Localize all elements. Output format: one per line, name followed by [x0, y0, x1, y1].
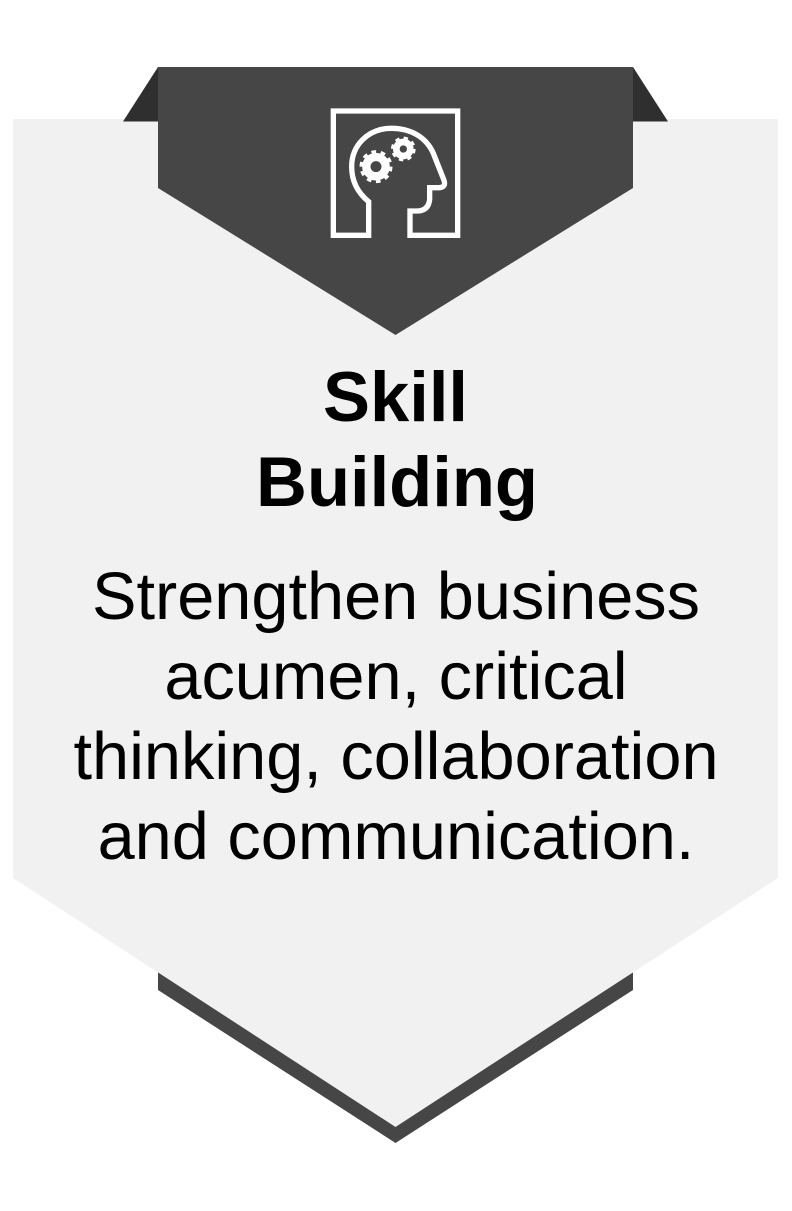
- left ribbon fold: [123, 67, 158, 122]
- large gear: [361, 152, 391, 181]
- body line 1: Strengthen business: [92, 560, 700, 634]
- body line 4: and communication.: [98, 800, 694, 874]
- right ribbon fold: [633, 67, 668, 122]
- bottom dark chevron shadow: [158, 960, 633, 1143]
- heading line 2: Building: [256, 442, 538, 521]
- body line 2: acumen, critical: [164, 640, 628, 714]
- icon: head with gears: [333, 111, 458, 235]
- dark top ribbon: [158, 67, 633, 335]
- small gear: [393, 138, 414, 160]
- icon frame and head outline: [333, 111, 458, 235]
- body text: [73, 560, 719, 874]
- body line 3: thinking, collaboration: [73, 720, 719, 794]
- heading: [256, 357, 538, 521]
- heading line 1: Skill: [323, 357, 468, 436]
